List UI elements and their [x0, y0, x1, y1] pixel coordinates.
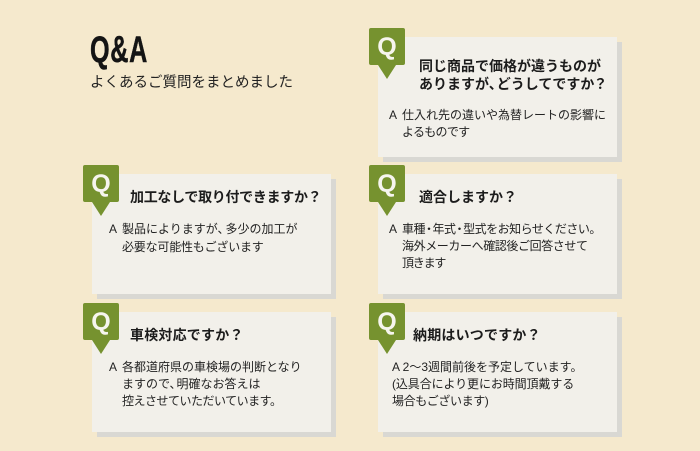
- icon: Q badge: Q: [91, 308, 111, 336]
- icon: Q badge: [369, 165, 405, 216]
- answer text: 海外メーカーへ確認後ご回答させて: [402, 239, 588, 253]
- answer text: A: [389, 108, 397, 122]
- answer text: 場合もございます): [392, 394, 488, 408]
- answer text: 控えさせていただいています。: [122, 394, 281, 408]
- answer text: A: [109, 222, 117, 236]
- panel: delivery question: [369, 303, 622, 437]
- answer text: 仕入れ先の違いや為替レートの影響に: [402, 108, 606, 122]
- answer text: 車種・年式・型式をお知らせください。: [402, 222, 601, 236]
- answer text: 頂きます: [402, 256, 445, 270]
- icon: Q badge: [369, 28, 405, 79]
- answer text: ますので、明確なお答えは: [122, 377, 261, 391]
- answer text: A: [389, 222, 397, 236]
- icon: Q badge: Q: [91, 170, 111, 198]
- answer text: [109, 360, 302, 408]
- card background: [92, 174, 331, 294]
- answer text: [109, 222, 298, 254]
- panel: inspection question: [83, 303, 336, 437]
- panel: price question: [369, 28, 622, 162]
- icon: Q badge: Q: [377, 170, 397, 198]
- question heading: 適合しますか？: [419, 189, 517, 205]
- subtitle: よくあるご質問をまとめました: [90, 75, 293, 91]
- question heading: 納期はいつですか？: [413, 327, 541, 343]
- question heading: ありますが、どうしてですか？: [419, 76, 607, 92]
- card background: [378, 312, 617, 432]
- icon: Q badge: [83, 165, 119, 216]
- panel: compatibility question: [369, 165, 622, 299]
- question heading: [419, 58, 607, 92]
- icon: Q badge: Q: [377, 308, 397, 336]
- panel: fitting work question: [83, 165, 336, 299]
- answer text: [389, 108, 606, 139]
- question heading: 加工なしで取り付できますか？: [130, 189, 321, 205]
- answer text: A: [109, 360, 117, 374]
- answer text: よるものです: [402, 125, 469, 139]
- icon: Q badge: [369, 303, 405, 354]
- answer text: (込具合により更にお時間頂戴する: [392, 377, 574, 391]
- answer text: [389, 222, 601, 270]
- answer text: [392, 360, 582, 408]
- answer text: 各都道府県の車検場の判断となり: [122, 360, 302, 374]
- icon: Q badge: [83, 303, 119, 354]
- answer text: 製品によりますが、多少の加工が: [122, 222, 298, 236]
- answer text: A 2～3週間前後を予定しています。: [392, 360, 582, 374]
- title: Q&A: Q&A: [90, 29, 148, 70]
- question heading: 同じ商品で価格が違うものが: [419, 58, 601, 74]
- question heading: 車検対応ですか？: [130, 327, 244, 343]
- card background: [378, 37, 617, 157]
- card background: [378, 174, 617, 294]
- icon: Q badge: Q: [377, 33, 397, 61]
- answer text: 必要な可能性もございます: [122, 240, 264, 254]
- card background: [92, 312, 331, 432]
